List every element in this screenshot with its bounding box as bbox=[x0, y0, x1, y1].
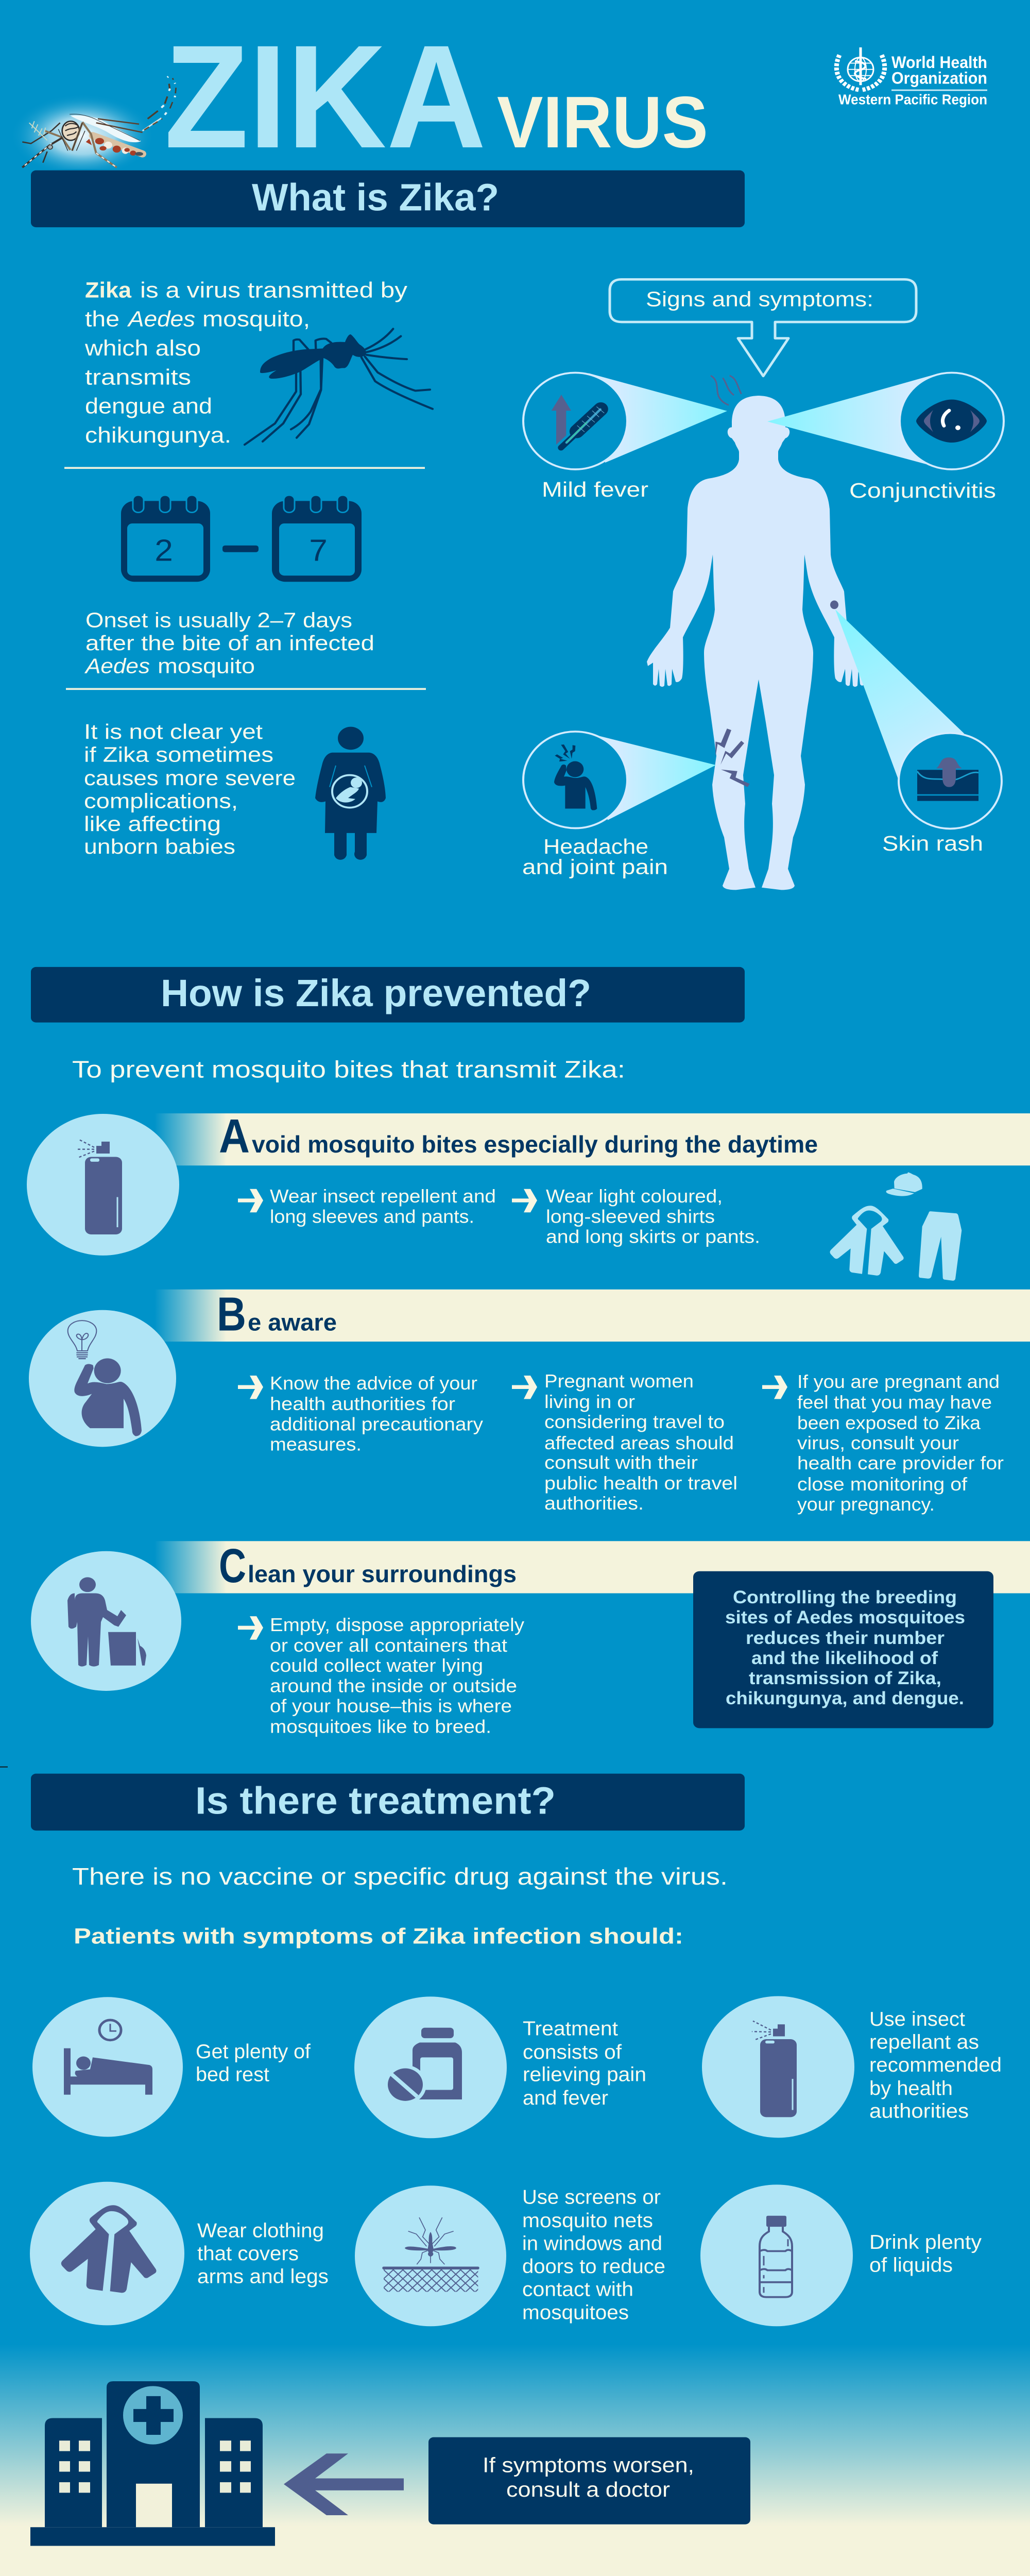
icon: calendars 2 to 7: 7 bbox=[309, 533, 328, 568]
text: pain relief: Treatment bbox=[523, 2017, 618, 2040]
text: light clothing: Wear light coloured, bbox=[546, 1185, 723, 1206]
arrow: to hospital bbox=[284, 2453, 404, 2515]
text: if you are pregnant: virus, consult your bbox=[797, 1432, 959, 1453]
item: protective clothing bbox=[30, 2182, 329, 2325]
icon: skin layers bbox=[917, 757, 978, 801]
arrow B2 bbox=[512, 1376, 537, 1399]
text: know the advice: health authorities for bbox=[270, 1393, 455, 1414]
band heading C bbox=[154, 1539, 1030, 1593]
text: empty containers: mosquitoes like to breed. bbox=[270, 1716, 491, 1737]
callout: signs and symptoms: Signs and symptoms: bbox=[646, 287, 873, 311]
ZIKA wordmark: ZIKA bbox=[164, 14, 486, 179]
callout: consult a doctor: consult a doctor bbox=[506, 2478, 670, 2501]
text block: transmission: Zika bbox=[85, 278, 131, 302]
text block: transmission: chikungunya. bbox=[85, 423, 231, 448]
icon: thermometer bbox=[552, 395, 604, 448]
illustration: human body bbox=[647, 396, 870, 890]
text: no vaccine: There is no vaccine or specific drug against the virus. bbox=[72, 1863, 728, 1890]
callout: controlling breeding sites: chikungunya, and dengue. bbox=[726, 1688, 964, 1708]
heading: Is there treatment?: Is there treatment? bbox=[195, 1780, 556, 1822]
text: drink liquids: Drink plenty bbox=[869, 2230, 982, 2253]
heading: Is there treatment? bbox=[31, 1774, 745, 1831]
text block: transmission bbox=[84, 278, 408, 448]
text: screens and nets: contact with bbox=[522, 2278, 633, 2300]
callout: controlling breeding sites: sites of Aedes mosquitoes bbox=[725, 1607, 965, 1628]
icon: person with headache bbox=[554, 744, 597, 810]
text: screens and nets: in windows and bbox=[522, 2232, 662, 2255]
text: pregnant women travel: public health or travel bbox=[544, 1472, 737, 1494]
heading: How is Zika prevented? bbox=[31, 967, 745, 1023]
icon: pregnant woman bbox=[315, 727, 386, 860]
text: pain relief: and fever bbox=[523, 2087, 608, 2109]
text: insect repellant: recommended bbox=[869, 2054, 1002, 2076]
text block: complications: if Zika sometimes bbox=[84, 743, 273, 766]
text: pregnant women travel: living in or bbox=[544, 1391, 635, 1412]
icon: bed and clock bbox=[64, 2020, 152, 2095]
band heading C: lean your surroundings bbox=[248, 1561, 517, 1588]
text block: transmission: mosquito, bbox=[202, 307, 310, 331]
text: if you are pregnant: health care provider for bbox=[797, 1452, 1004, 1473]
item: insect repellant bbox=[702, 1996, 1002, 2138]
text: bed rest: Get plenty of bbox=[196, 2040, 311, 2063]
callout: controlling breeding sites: Controlling the breeding bbox=[733, 1587, 957, 1607]
symptom: conjunctivitis bbox=[767, 372, 1004, 502]
text: empty containers: around the inside or outside bbox=[270, 1675, 517, 1696]
panel: A avoid mosquito bites bbox=[27, 1110, 1030, 1281]
text: pregnant women travel bbox=[544, 1370, 737, 1514]
text: empty containers bbox=[270, 1614, 524, 1737]
icon: pregnant person thinking bbox=[29, 1310, 176, 1447]
callout: controlling breeding sites: and the likelihood of bbox=[751, 1648, 938, 1668]
item: bed rest bbox=[32, 1997, 311, 2137]
icon: mosquito silhouette bbox=[245, 329, 433, 445]
symptom: skin rash bbox=[830, 600, 1002, 855]
text: light clothing: long-sleeved shirts bbox=[546, 1206, 715, 1227]
heading: What is Zika? bbox=[31, 171, 745, 227]
title block bbox=[10, 14, 708, 179]
icon: spray can bbox=[752, 2021, 797, 2117]
panel: what is zika facts bbox=[64, 278, 433, 860]
label: conjunctivitis: Conjunctivitis bbox=[849, 479, 996, 502]
text: protective clothing: arms and legs bbox=[197, 2265, 329, 2287]
heading: What is Zika?: What is Zika? bbox=[252, 176, 499, 219]
organization name: World Health bbox=[891, 53, 987, 72]
text block: transmission: Aedes bbox=[127, 307, 195, 331]
text: if you are pregnant bbox=[797, 1371, 1004, 1515]
WHO logo bbox=[836, 47, 987, 108]
item: drink liquids bbox=[700, 2184, 982, 2326]
icon: calendars 2 to 7 bbox=[121, 495, 362, 582]
bottom gradient background bbox=[0, 2340, 1030, 2576]
band heading A: void mosquito bites especially during the daytime bbox=[252, 1131, 818, 1158]
text: light clothing bbox=[546, 1185, 760, 1247]
text: pregnant women travel: Pregnant women bbox=[544, 1370, 694, 1392]
icon: pill bottle bbox=[384, 2028, 462, 2104]
text: empty containers: or cover all containers that bbox=[270, 1635, 508, 1655]
icon: fever lines above head bbox=[711, 376, 741, 405]
text: if you are pregnant: your pregnancy. bbox=[797, 1494, 935, 1515]
text: pain relief: consists of bbox=[523, 2040, 622, 2063]
VIRUS wordmark: VIRUS bbox=[497, 81, 708, 163]
subheading: patients should: Patients with symptoms of Zika infection should: bbox=[74, 1924, 683, 1948]
arrow B1 bbox=[238, 1376, 263, 1399]
symptom: mild fever bbox=[523, 372, 727, 501]
label: headache and joint pain bbox=[522, 835, 668, 878]
icon: aedes mosquito photo bbox=[10, 67, 176, 169]
band heading A bbox=[154, 1110, 1030, 1165]
band heading A: A bbox=[219, 1110, 250, 1163]
text: insect repellant: authorities bbox=[869, 2099, 969, 2122]
band heading B: B bbox=[217, 1288, 246, 1341]
arrow A1 bbox=[238, 1189, 263, 1212]
text: drink liquids: of liquids bbox=[869, 2253, 953, 2276]
callout: controlling breeding sites: transmission of Zika, bbox=[749, 1668, 941, 1688]
heading: How is Zika prevented?: How is Zika prevented? bbox=[161, 972, 591, 1014]
band heading B bbox=[154, 1288, 1030, 1342]
text: pregnant women travel: consult with their bbox=[544, 1452, 698, 1473]
icon: joint pain bolts bbox=[715, 728, 750, 787]
panel: B be aware bbox=[29, 1288, 1030, 1515]
panel: signs and symptoms bbox=[522, 279, 1004, 890]
item: screens and nets bbox=[355, 2185, 665, 2326]
icon: mosquito over net bbox=[382, 2217, 479, 2292]
icon: WHO emblem bbox=[836, 47, 885, 90]
icon: hooded jacket bbox=[61, 2205, 157, 2293]
panel: C clean your surroundings bbox=[31, 1539, 1030, 1737]
text: know the advice: measures. bbox=[270, 1434, 362, 1454]
text block: transmission: the bbox=[85, 307, 119, 331]
callout: consult a doctor bbox=[428, 2437, 750, 2524]
symptom: headache and joint pain bbox=[522, 728, 750, 878]
text: protective clothing: that covers bbox=[197, 2242, 299, 2265]
text: wear repellent: Wear insect repellent and bbox=[270, 1185, 496, 1206]
text block: complications: complications, bbox=[84, 789, 238, 812]
icon: eye bbox=[916, 399, 987, 443]
text: pregnant women travel: affected areas should bbox=[544, 1432, 734, 1453]
text block: onset bbox=[84, 608, 374, 677]
text: empty containers: Empty, dispose appropriately bbox=[270, 1614, 524, 1635]
text block: onset: mosquito bbox=[158, 654, 255, 677]
text: insect repellant: by health bbox=[869, 2077, 953, 2099]
text: bed rest bbox=[196, 2040, 311, 2086]
text: if you are pregnant: close monitoring of bbox=[797, 1473, 968, 1495]
text: pregnant women travel: authorities. bbox=[544, 1493, 644, 1514]
callout: controlling breeding sites bbox=[693, 1571, 993, 1728]
text: bed rest: bed rest bbox=[196, 2063, 269, 2086]
text: pregnant women travel: considering travel to bbox=[544, 1411, 725, 1432]
text block: transmission: dengue and bbox=[85, 394, 212, 418]
band heading B: e aware bbox=[248, 1309, 337, 1336]
text: insect repellant: Use insect bbox=[869, 2007, 965, 2030]
icon: water bottle bbox=[760, 2216, 792, 2297]
band heading C: C bbox=[219, 1539, 246, 1592]
text: know the advice: Know the advice of your bbox=[270, 1372, 477, 1394]
text block: transmission: is a virus transmitted by bbox=[140, 278, 408, 302]
callout: signs and symptoms bbox=[610, 279, 916, 376]
text: screens and nets: Use screens or bbox=[522, 2185, 661, 2208]
text block: onset: Onset is usually 2–7 days bbox=[85, 608, 352, 632]
icon: cap, jacket and pants bbox=[830, 1172, 962, 1281]
intro text: prevention: To prevent mosquito bites that transmit Zika: bbox=[72, 1056, 625, 1083]
icon: repellent spray bbox=[27, 1114, 179, 1256]
text: know the advice: additional precautionary bbox=[270, 1414, 483, 1434]
label: headache and joint pain: Headache bbox=[543, 835, 648, 858]
text: insect repellant bbox=[869, 2007, 1002, 2122]
label: mild fever: Mild fever bbox=[542, 478, 648, 501]
text: screens and nets bbox=[522, 2185, 665, 2324]
text: screens and nets: mosquitoes bbox=[522, 2301, 629, 2324]
text: if you are pregnant: feel that you may have bbox=[797, 1392, 992, 1413]
WHO logo: Organization bbox=[891, 69, 987, 88]
text: wear repellent: long sleeves and pants. bbox=[270, 1206, 474, 1227]
text block: complications: It is not clear yet bbox=[84, 720, 263, 743]
text: if you are pregnant: been exposed to Zika bbox=[797, 1412, 981, 1433]
label: skin rash: Skin rash bbox=[882, 832, 983, 855]
text: empty containers: could collect water lying bbox=[270, 1655, 483, 1675]
item: pain relief bbox=[354, 1996, 646, 2138]
text block: transmission: which also bbox=[84, 336, 201, 361]
text: protective clothing bbox=[197, 2219, 329, 2287]
text block: complications: unborn babies bbox=[84, 835, 235, 858]
icon: person disposing rubbish bbox=[31, 1551, 181, 1691]
panel: patient advice grid bbox=[30, 1996, 1002, 2326]
label: headache and joint pain: and joint pain bbox=[522, 855, 668, 878]
text: light clothing: and long skirts or pants. bbox=[546, 1226, 760, 1247]
callout: controlling breeding sites: reduces their number bbox=[746, 1628, 945, 1648]
panel: see a doctor bbox=[30, 2381, 750, 2546]
text block: transmission: transmits bbox=[85, 365, 191, 389]
text: wear repellent bbox=[270, 1185, 496, 1227]
text: screens and nets: mosquito nets bbox=[522, 2209, 653, 2232]
text: if you are pregnant: If you are pregnant and bbox=[797, 1371, 1000, 1392]
arrow C1 bbox=[238, 1616, 263, 1640]
text: insect repellant: repellant as bbox=[869, 2030, 979, 2053]
arrow A2 bbox=[512, 1189, 537, 1212]
region name: Western Pacific Region bbox=[838, 92, 987, 108]
callout: consult a doctor: If symptoms worsen, bbox=[483, 2453, 694, 2477]
text: drink liquids bbox=[869, 2230, 982, 2276]
text: empty containers: of your house–this is where bbox=[270, 1696, 512, 1716]
text: screens and nets: doors to reduce bbox=[522, 2255, 665, 2278]
text block: complications bbox=[84, 720, 296, 858]
icon: calendars 2 to 7: 2 bbox=[154, 533, 173, 568]
text: know the advice bbox=[270, 1372, 483, 1454]
text: pain relief bbox=[523, 2017, 646, 2109]
text block: complications: like affecting bbox=[84, 812, 221, 836]
text: pain relief: relieving pain bbox=[523, 2063, 646, 2086]
icon: hospital building bbox=[30, 2381, 275, 2546]
text block: onset: after the bite of an infected bbox=[85, 632, 374, 655]
arrow B3 bbox=[762, 1376, 787, 1399]
text block: complications: causes more severe bbox=[84, 766, 296, 790]
text: protective clothing: Wear clothing bbox=[197, 2219, 324, 2242]
text block: onset: Aedes bbox=[84, 654, 150, 677]
